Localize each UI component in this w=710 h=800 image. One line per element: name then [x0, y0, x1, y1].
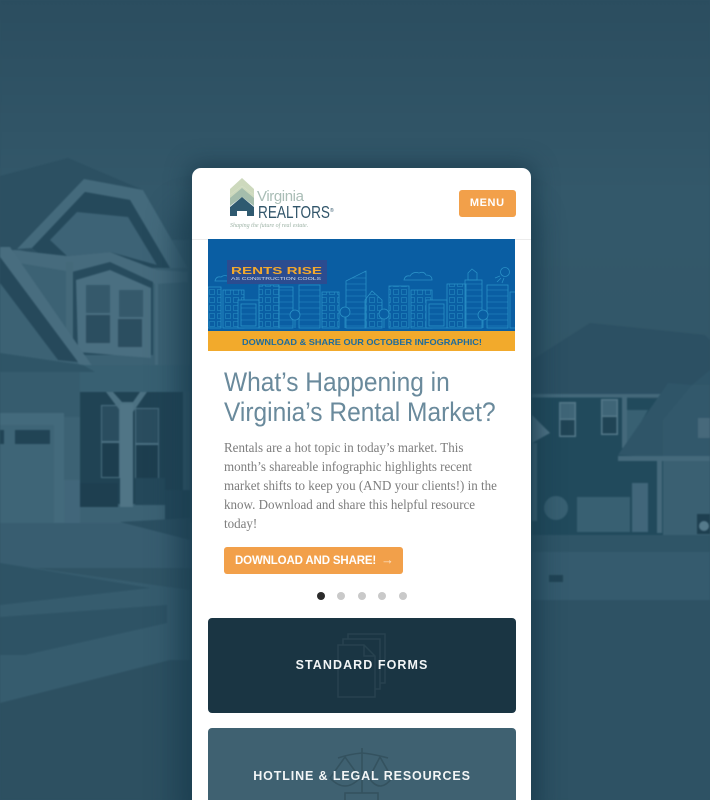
download button: →	[381, 552, 394, 567]
carousel dots	[317, 592, 407, 600]
right street	[532, 535, 710, 800]
heading: Virginia’s Rental Market?	[224, 396, 496, 426]
right house	[532, 323, 710, 537]
body text: Rentals are a hot topic in today’s market. This	[224, 440, 463, 455]
body text: know. Download and share this helpful resource	[224, 497, 475, 512]
tile: standard forms	[208, 618, 516, 713]
menu button: MENU	[470, 197, 505, 209]
icon: scales	[329, 748, 393, 800]
skyline line art	[208, 268, 516, 328]
heading: What’s Happening in	[224, 367, 450, 397]
left lawn and street	[0, 518, 192, 800]
left house	[0, 158, 190, 525]
download button: DOWNLOAD AND SHARE!	[235, 555, 376, 567]
body text	[224, 440, 497, 531]
logo: Virginia Realtors	[230, 178, 334, 229]
logo: Virginia Realtors: ®	[330, 207, 334, 214]
logo: Virginia Realtors: Shaping the future of real estate.	[230, 222, 308, 229]
tile: hotline and legal resources	[208, 728, 516, 800]
banner title box	[227, 260, 327, 284]
body text: market shifts to keep you (AND your clients!) in the	[224, 478, 497, 493]
site header	[192, 168, 531, 240]
icon: documents	[338, 634, 386, 698]
banner: rents rise	[208, 239, 515, 351]
tile label: STANDARD FORMS	[296, 658, 428, 672]
banner title box: RENTS RISE	[231, 265, 322, 277]
menu button	[459, 190, 516, 217]
logo: Virginia Realtors: Virginia	[257, 188, 305, 205]
banner title box: AS CONSTRUCTION COOLS	[231, 276, 321, 281]
tile label: HOTLINE & LEGAL RESOURCES	[253, 769, 471, 783]
download button	[224, 547, 403, 574]
phone card	[192, 168, 531, 800]
body text: month’s shareable infographic highlights recent	[224, 459, 472, 474]
banner download strip: DOWNLOAD & SHARE OUR OCTOBER INFOGRAPHIC!	[242, 337, 482, 347]
body text: today!	[224, 516, 257, 531]
heading	[224, 367, 496, 426]
banner download strip	[208, 331, 515, 351]
